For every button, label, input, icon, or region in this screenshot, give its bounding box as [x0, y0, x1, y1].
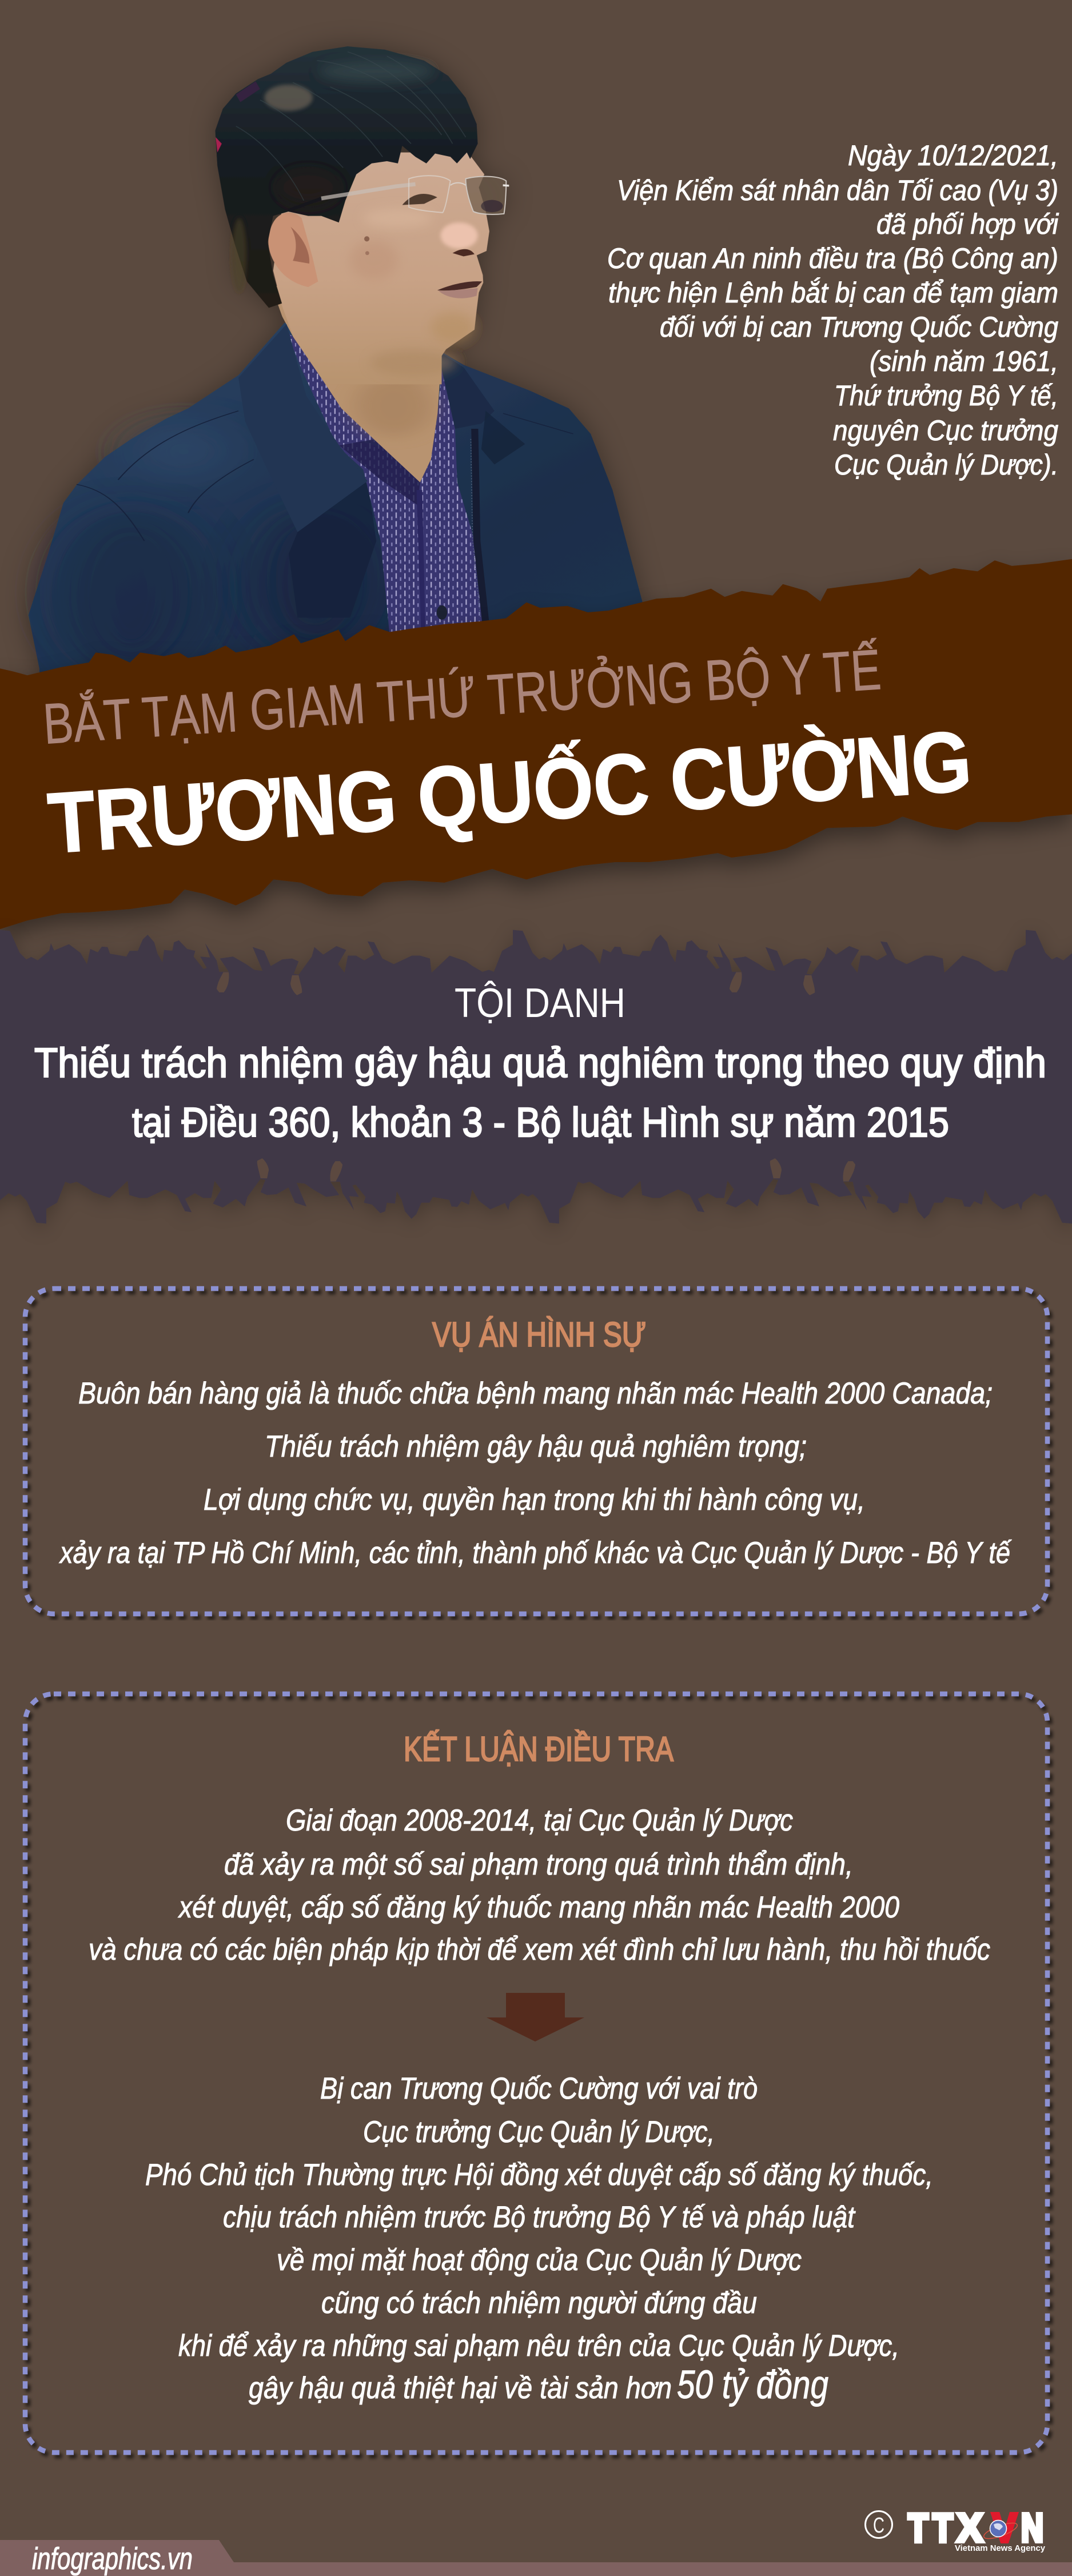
right collar — [442, 353, 495, 429]
hair — [215, 46, 478, 308]
logotype: T — [908, 2505, 928, 2550]
bottom torn edge — [0, 1060, 1072, 1223]
panel: brown torn title banner — [0, 559, 1072, 929]
responsibility text: gây hậu quả thiệt hại về tài sản hơn — [249, 2371, 672, 2405]
footer site name: infographics.vn — [32, 2542, 193, 2576]
banner shape — [0, 559, 1072, 929]
dashed border — [25, 1694, 1047, 2453]
copyright mark — [866, 2511, 892, 2538]
intro text block: Ngày 10/12/2021, — [848, 139, 1058, 172]
findings text: Giai đoạn 2008-2014, tại Cục Quản lý Dược — [286, 1804, 793, 1837]
findings text: đã xảy ra một số sai phạm trong quá trình thẩm định, — [224, 1848, 853, 1881]
intro text block: đã phối hợp với — [876, 208, 1059, 240]
panel: investigation conclusion — [25, 1694, 1047, 2453]
dots on cheek — [364, 236, 369, 241]
charge heading: TỘI DANH — [455, 980, 625, 1026]
heading: KẾT LUẬN ĐIỀU TRA — [404, 1730, 674, 1768]
shadow under collar — [289, 481, 376, 617]
intro text block — [607, 139, 1059, 481]
title: main name: TRƯƠNG QUỐC CƯỜNG — [45, 712, 974, 871]
face and neck skin — [273, 153, 489, 384]
logotype: X — [957, 2505, 983, 2550]
head — [215, 46, 509, 384]
logotype — [908, 2505, 1043, 2550]
responsibility text: Cục trưởng Cục Quản lý Dược, — [363, 2115, 715, 2149]
logotype: T — [933, 2505, 953, 2550]
neck — [271, 286, 477, 482]
responsibility text — [145, 2072, 933, 2405]
logo: TTXVN: C — [873, 2514, 884, 2538]
responsibility text: chịu trách nhiệm trước Bộ trưởng Bộ Y tế và pháp luật — [223, 2200, 856, 2234]
footer strip — [0, 2540, 1072, 2576]
case lines — [58, 1377, 1012, 1570]
left collar — [238, 324, 368, 532]
ear — [268, 213, 318, 287]
charge text — [34, 1040, 1046, 1146]
agency name: Vietnam News Agency — [955, 2543, 1046, 2553]
panel: purple charge banner — [0, 930, 1072, 1223]
responsibility text: cũng có trách nhiệm người đứng đầu — [321, 2286, 757, 2320]
case lines: Lợi dụng chức vụ, quyền hạn trong khi thi hành công vụ, — [204, 1483, 865, 1517]
panel: criminal case — [25, 1289, 1047, 1614]
intro text block: nguyên Cục trưởng — [833, 414, 1058, 446]
case lines: Thiếu trách nhiệm gây hậu quả nghiêm trọng; — [265, 1430, 807, 1464]
top torn edge — [0, 930, 1072, 1094]
logo: TTXVN — [866, 2505, 1046, 2553]
intro text block: (sinh năm 1961, — [870, 345, 1058, 377]
findings text: xét duyệt, cấp số đăng ký thuốc mang nhãn mác Health 2000 — [177, 1891, 899, 1924]
findings text — [89, 1804, 990, 1967]
jacket and shirt — [29, 286, 656, 694]
glasses — [289, 176, 509, 214]
zipper — [475, 429, 485, 623]
hair strands — [236, 52, 466, 201]
logotype: V — [993, 2505, 1017, 2550]
nostril, eye and mouth — [453, 249, 475, 256]
portrait photo of Trương Quốc Cường — [29, 46, 656, 694]
title: subtitle line: BẮT TẠM GIAM THỨ TRƯỞNG BỘ Y TẾ — [41, 637, 883, 756]
shirt — [286, 332, 484, 633]
responsibility text: về mọi mặt hoạt động của Cục Quản lý Dược — [277, 2243, 802, 2277]
heading: VỤ ÁN HÌNH SỰ — [432, 1315, 646, 1354]
logotype: N — [1021, 2505, 1043, 2550]
responsibility text: Bị can Trương Quốc Cường với vai trò — [320, 2072, 758, 2106]
dashed border — [25, 1289, 1047, 1614]
globe — [982, 2520, 1019, 2542]
responsibility text: khi để xảy ra những sai phạm nêu trên của Cục Quản lý Dược, — [178, 2329, 899, 2363]
highlighted amount: 50 tỷ đồng — [677, 2362, 828, 2407]
responsibility text: Phó Chủ tịch Thường trực Hội đồng xét duyệt cấp số đăng ký thuốc, — [145, 2158, 933, 2192]
arrow: down — [487, 1993, 584, 2041]
charge text: tại Điều 360, khoản 3 - Bộ luật Hình sự năm 2015 — [132, 1100, 949, 1146]
